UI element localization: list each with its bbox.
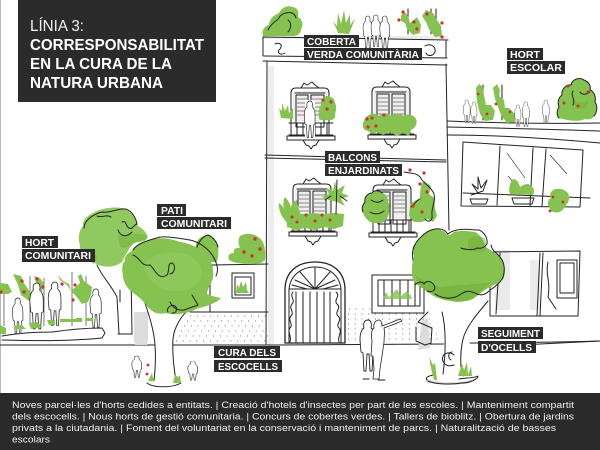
barred window with plants	[372, 275, 424, 313]
title panel: LÍNIA 3:	[30, 16, 84, 35]
label: hort comunitari: HORT	[25, 238, 54, 249]
label: cura dels escocells: ESCOCELLS	[218, 362, 278, 373]
footer panel: actions list: Noves parcel·les d'horts cedides a entitats. | Creació d'hotels d'insectes per part de les escoles. | Manteniment compartit	[12, 400, 574, 411]
balcony bottom left	[279, 178, 349, 245]
school window plants	[471, 177, 569, 213]
label: hort escolar	[507, 48, 565, 74]
rooftop garden	[262, 6, 444, 49]
tree: back garden tree	[79, 208, 148, 334]
dotted pavement	[176, 309, 440, 341]
community garden	[0, 272, 147, 345]
balcony bottom right	[362, 168, 437, 246]
label: coberta verda comunitaria: COBERTA	[307, 37, 356, 48]
footer panel: actions list: privats a la ciutadania. | Foment del voluntariat en la conservació i manteniment de parcs. | Naturalització de basses	[12, 423, 556, 434]
label: seguiment d'ocells: SEGUIMENT	[481, 329, 540, 340]
label: hort escolar: HORT	[510, 50, 540, 61]
small bushes behind wall	[195, 234, 265, 264]
title panel: NATURA URBANA	[30, 75, 163, 92]
label: hort comunitari	[22, 236, 95, 262]
footer panel: actions list: escolars	[12, 434, 50, 446]
label: pati comunitari	[157, 204, 231, 230]
main apartment building	[262, 36, 449, 346]
label: coberta verda comunitaria: VERDA COMUNITÀRIA	[307, 48, 419, 61]
tree: front right	[412, 229, 505, 385]
school roof garden	[463, 79, 597, 126]
label: hort escolar: ESCOLAR	[510, 63, 563, 74]
label: pati comunitari: PATI	[161, 206, 183, 217]
title panel: EN LA CURA DE LA	[30, 56, 172, 73]
low left building	[190, 264, 268, 312]
label: seguiment d'ocells: D'OCELLS	[481, 343, 532, 354]
ground line	[0, 341, 600, 345]
title panel	[18, 0, 216, 102]
label: balcons enjardinats	[325, 151, 402, 177]
couple pointing	[360, 319, 402, 380]
footer panel: actions list	[0, 393, 600, 450]
footer panel: actions list: dels escocells. | Nous horts de gestió comunitaria. | Concurs de cobertes verdes. | Tallers de bioblitz. | Obertura de jardins	[12, 412, 574, 422]
label: seguiment d'ocells	[478, 327, 543, 354]
label: hort comunitari: COMUNITARI	[25, 251, 91, 262]
label: pati comunitari: COMUNITARI	[161, 219, 227, 230]
entrance door	[285, 262, 345, 343]
balcony top left	[279, 82, 336, 149]
title panel: CORRESPONSABILITAT	[30, 37, 204, 54]
label: balcons enjardinats: BALCONS	[328, 153, 377, 164]
tree: front left	[122, 237, 221, 387]
label: coberta verda comunitaria	[304, 35, 422, 61]
label: balcons enjardinats: ENJARDINATS	[328, 166, 399, 177]
right school building	[447, 121, 600, 345]
label: cura dels escocells	[214, 346, 282, 373]
label: cura dels escocells: CURA DELS	[218, 348, 276, 359]
balcony top right	[363, 81, 417, 148]
